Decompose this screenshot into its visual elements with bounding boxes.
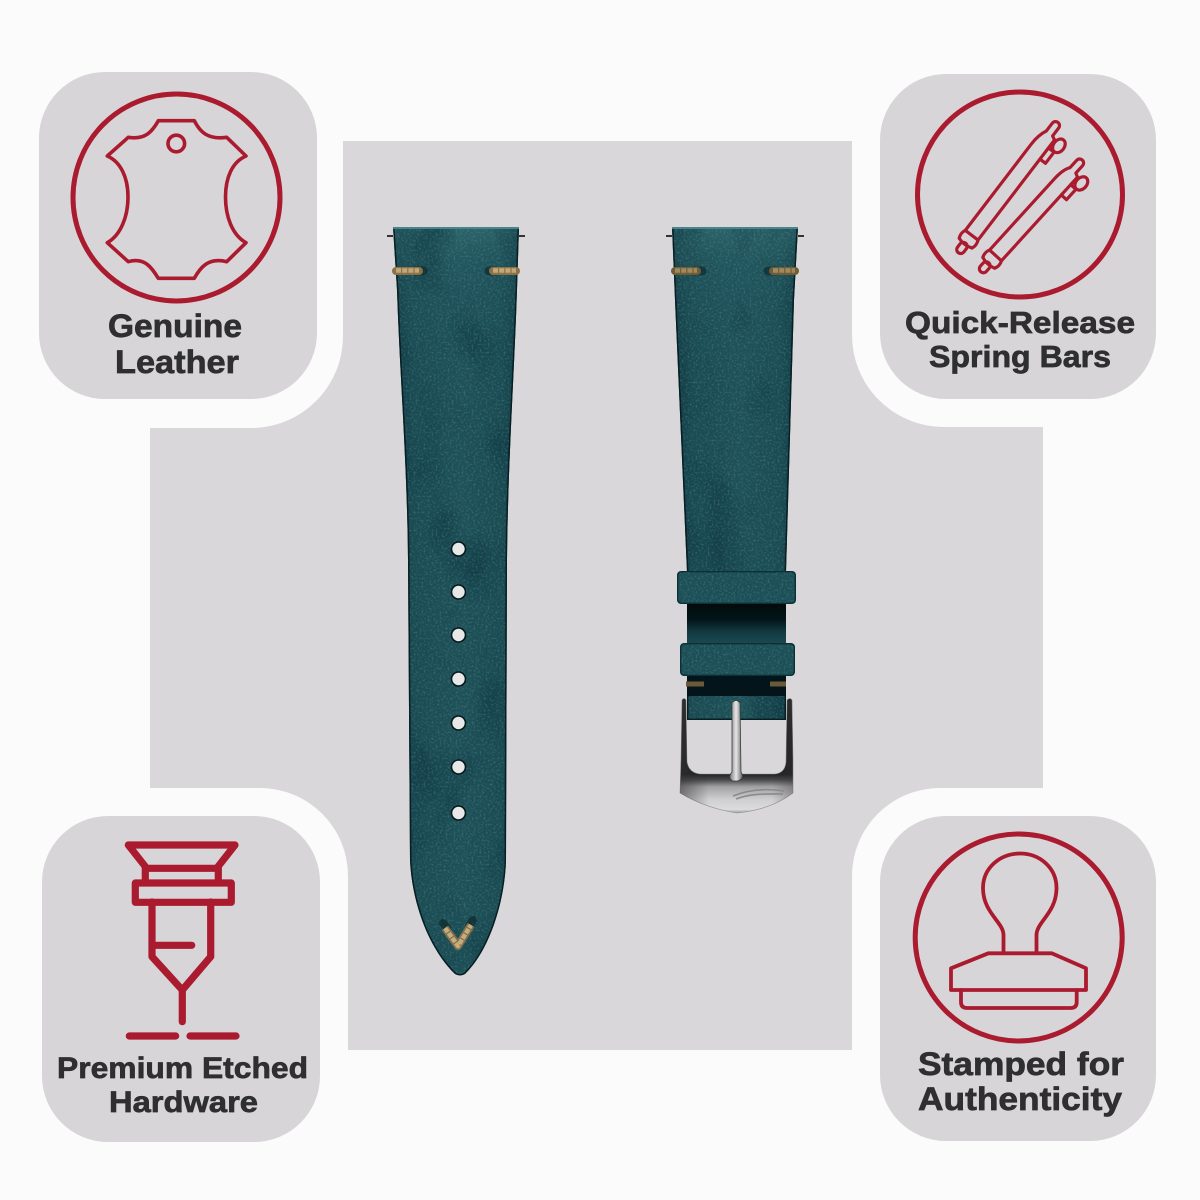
keeper loop lower — [680, 643, 795, 676]
panel: central grey backdrop — [150, 141, 1043, 1050]
stitching, short strap top — [675, 266, 795, 275]
panel: genuine leather — [39, 72, 317, 399]
engraved logo on buckle — [733, 790, 784, 799]
icon: spring bars in circle — [918, 92, 1122, 297]
leather body, long strap — [390, 225, 522, 980]
icon: leather hide in circle — [73, 94, 280, 301]
long strap piece — [387, 225, 525, 980]
label: quick-release spring bars: Spring Bars — [929, 339, 1111, 374]
stitching, long strap top — [396, 266, 516, 275]
icon: laser etching nozzle — [128, 845, 236, 1036]
card halo: bottom left — [0, 788, 348, 1200]
label: quick-release spring bars: Quick-Release — [905, 305, 1135, 340]
folded strap stitch under keeper — [686, 682, 786, 686]
stitching, strap tip — [443, 920, 473, 946]
buckle holes — [452, 542, 466, 820]
panel: stamped for authenticity — [880, 816, 1156, 1141]
label: stamped for authenticity: Authenticity — [918, 1081, 1122, 1117]
label: stamped for authenticity: Stamped for — [918, 1046, 1124, 1082]
card halo: top right — [852, 0, 1200, 427]
panel: premium etched hardware — [42, 816, 320, 1142]
label: genuine leather: Genuine — [108, 308, 242, 344]
label: quick-release spring bars — [905, 305, 1135, 374]
spring bar pins, long strap — [387, 235, 525, 237]
spring bar pins, short strap — [666, 235, 804, 237]
card halo: bottom right — [852, 788, 1200, 1200]
card halo: top left — [0, 0, 343, 428]
icon: rubber stamp in circle — [915, 834, 1122, 1041]
label: premium etched hardware: Hardware — [109, 1086, 258, 1119]
buckle tongue — [730, 700, 742, 781]
leather body, short strap — [670, 225, 800, 725]
label: premium etched hardware — [57, 1052, 308, 1119]
label: stamped for authenticity — [918, 1046, 1124, 1117]
label: premium etched hardware: Premium Etched — [57, 1052, 308, 1085]
keeper loop upper — [677, 571, 796, 604]
label: genuine leather: Leather — [115, 344, 239, 380]
short buckle strap piece — [666, 225, 804, 813]
panel: quick-release spring bars — [880, 74, 1156, 399]
steel buckle — [680, 698, 793, 813]
label: genuine leather — [108, 308, 242, 380]
